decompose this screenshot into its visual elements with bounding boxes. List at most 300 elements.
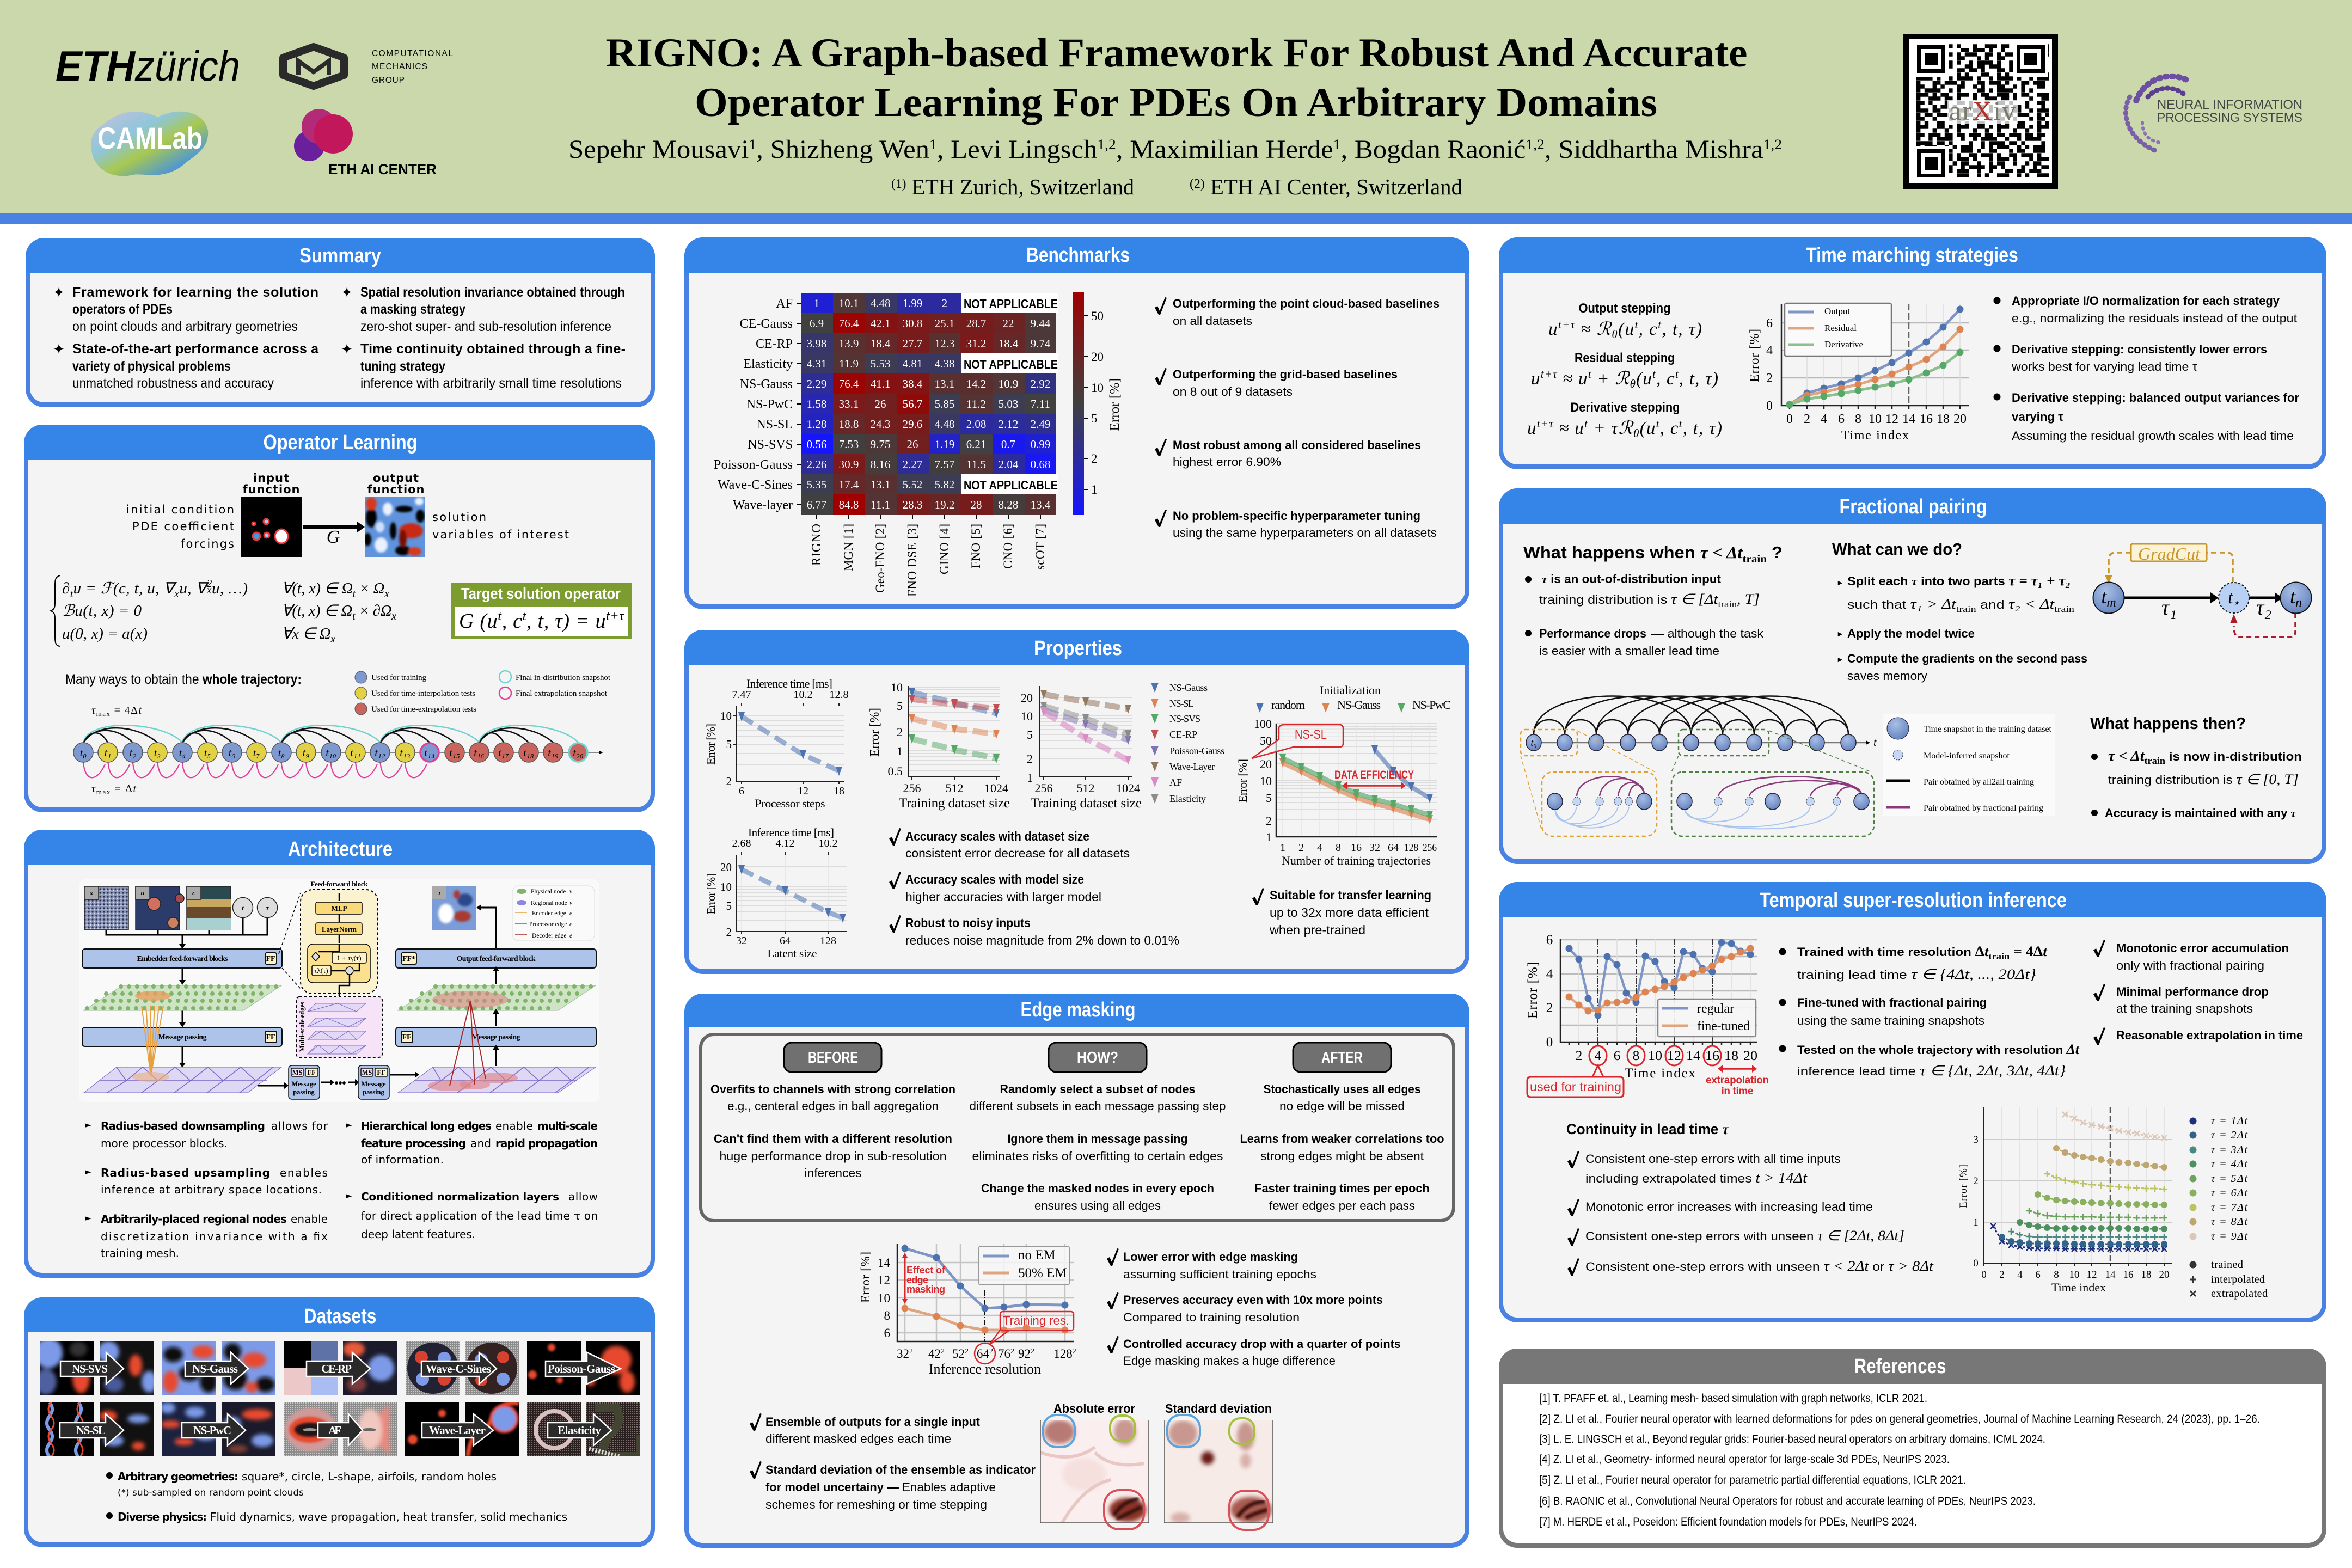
chart: transfer learning: 1 xyxy=(1266,830,1272,844)
what can we do block: saves memory xyxy=(1847,669,1928,683)
feed-forward block detail: LayerNorm xyxy=(322,925,357,933)
heatmap values: 1.28 xyxy=(807,418,826,431)
architecture notes: right: enable xyxy=(495,1119,533,1132)
panel: Operator Learning xyxy=(24,425,655,812)
what can we do block: ► xyxy=(1836,655,1844,664)
chart: dataset size (left): 5 xyxy=(897,699,903,713)
feed-forward block detail: τλ(τ) xyxy=(314,966,328,975)
before / how / after box: BEFORE xyxy=(808,1049,858,1067)
model column labels: MGN [1] xyxy=(842,524,855,571)
benchmark takeaways: Outperforming the grid-based baselines xyxy=(1173,367,1398,381)
uncertainty takeaways: different masked edges each time xyxy=(765,1432,951,1445)
properties takeaways: Accuracy scales with model size xyxy=(905,872,1084,886)
architecture notes: right: feature processing xyxy=(361,1137,466,1150)
chart: latent size: Inference time [ms] xyxy=(748,826,834,839)
legend: datasets: NS-SVS xyxy=(1169,713,1200,724)
legend: datasets: CE-RP xyxy=(1169,729,1197,740)
panel: Edge masking xyxy=(684,994,1469,1548)
dataset tiles: Wave-C-Sines xyxy=(426,1362,491,1375)
heatmap values: 9.75 xyxy=(871,438,890,451)
chart: inference resolution xyxy=(859,1244,1076,1377)
chart: regular vs fine-tuned: 14 xyxy=(1686,1049,1701,1063)
PDE equations: t xyxy=(353,588,356,600)
chart: inference resolution: 12 xyxy=(878,1273,890,1287)
chart: lead time continuity: 3 xyxy=(1973,1134,1979,1146)
trajectory diagram: t xyxy=(138,705,142,716)
stepping formulas: t+τ xyxy=(1541,367,1558,381)
trajectory diagram: t₁₁ xyxy=(350,747,361,759)
heatmap values: 8.16 xyxy=(871,458,890,471)
architecture diagram: Output feed-forward block xyxy=(456,955,536,963)
reference list: [5] Z. LI et al., Fourier neural operator for parametric partial differential equations, ICLR 2021. xyxy=(1539,1474,1966,1486)
heatmap values: 6.77 xyxy=(807,498,826,511)
architecture diagram: Embedder feed-forward blocks xyxy=(137,955,228,963)
colorbar: 20 xyxy=(1091,350,1104,364)
heatmap values: 18.4 xyxy=(999,337,1019,350)
trajectory diagram: t₂₀ xyxy=(573,747,584,759)
left text: unmatched robustness and accuracy xyxy=(72,376,274,391)
trajectory diagram: t₅ xyxy=(204,747,211,759)
chart: dataset size (left): Training dataset size xyxy=(899,796,1010,811)
not applicable labels xyxy=(964,297,1058,492)
output field: τ xyxy=(438,889,442,897)
feed-forward block detail: MLP xyxy=(332,904,347,912)
stepping formulas: t xyxy=(1656,417,1660,430)
chart legend xyxy=(1658,999,1756,1037)
model column labels: GINO [4] xyxy=(938,524,951,574)
colorbar: 2 xyxy=(1091,452,1098,465)
heatmap values: 10.1 xyxy=(839,297,859,310)
dataset row labels: AF xyxy=(776,297,793,311)
heatmap values: 4.48 xyxy=(871,297,890,310)
trajectory diagram: = Δ xyxy=(111,783,132,795)
chart: regular vs fine-tuned: 12 xyxy=(1667,1049,1681,1063)
results checks xyxy=(2093,940,2303,1045)
heatmap values: 76.4 xyxy=(839,317,859,330)
heatmap values: 76.4 xyxy=(839,377,859,390)
legend: lead times: extrapolated xyxy=(2211,1288,2268,1300)
chart: error vs time index: 8 xyxy=(1855,412,1861,426)
heading: References xyxy=(1854,1355,1946,1378)
chart: latent size: 10.2 xyxy=(819,837,837,849)
results checks: Minimal performance drop xyxy=(2116,985,2269,999)
chart: dataset size (left): 1024 xyxy=(984,781,1008,795)
continuity in lead time notes xyxy=(1566,1121,1934,1276)
PDE equations: t xyxy=(352,610,356,622)
architecture notes: left: allows for xyxy=(271,1119,328,1132)
model column labels: Geo-FNO [2] xyxy=(873,524,887,593)
chart: latent size: 128 xyxy=(820,935,836,947)
architecture notes: left: inference at arbitrary space locations. xyxy=(101,1183,322,1196)
header banner xyxy=(0,0,2352,224)
strategy notes: e.g., normalizing the residuals instead of the output xyxy=(2012,311,2298,325)
model column labels: FNO [5] xyxy=(969,524,983,568)
continuity in lead time notes: Consistent one-step errors with all time inputs xyxy=(1585,1152,1841,1166)
chart: dataset size (right): 256 xyxy=(1034,781,1053,795)
chart: error vs time index: 12 xyxy=(1885,412,1898,426)
chart: error vs time index: 20 xyxy=(1953,412,1967,426)
heatmap values: 30.9 xyxy=(839,458,859,471)
colorbar: 10 xyxy=(1091,381,1104,395)
heatmap values: 28 xyxy=(970,498,982,511)
legend: node and edge types xyxy=(512,886,595,941)
architecture notes: right: and xyxy=(470,1137,491,1150)
chart: inference resolution: Inference resolution xyxy=(929,1361,1041,1377)
model column labels xyxy=(810,524,1047,597)
what happens block: What happens when τ < Δt xyxy=(1523,543,1741,562)
what can we do block: ► xyxy=(1836,629,1844,638)
heatmap values: 11.1 xyxy=(871,498,890,511)
stepping formulas: t xyxy=(1588,367,1592,381)
stepping formulas: t+τ xyxy=(1558,318,1576,331)
heatmap values: 2.04 xyxy=(999,458,1019,471)
training resolution callout xyxy=(975,1312,1074,1364)
uncertainty takeaways: schemes for remeshing or time stepping xyxy=(765,1498,987,1511)
architecture diagram xyxy=(79,879,599,1102)
what happens then block xyxy=(2090,714,2302,820)
chart: transfer learning: 100 xyxy=(1254,717,1272,731)
right text: Spatial resolution invariance obtained through xyxy=(360,285,625,300)
training marks and callouts xyxy=(1527,1046,1721,1097)
fractional pairing graph xyxy=(1521,696,1877,836)
chart: lead time continuity: 2 xyxy=(1973,1175,1979,1187)
stepping formulas: (u xyxy=(1636,369,1652,389)
PDE equations: x xyxy=(391,610,396,622)
what happens block xyxy=(1523,543,1783,658)
trajectory heading: Many ways to obtain the whole trajectory: xyxy=(65,672,302,687)
strategy notes: varying τ xyxy=(2012,410,2063,424)
pairing legend: Pair obtained by all2all training xyxy=(1924,777,2034,787)
star bullets: ✦ xyxy=(341,341,353,358)
logo: computational mechanics group: GROUP xyxy=(372,76,405,85)
chart: dataset size (right): 1 xyxy=(1027,771,1033,785)
strategy notes xyxy=(1994,294,2299,443)
architecture notes: left: Radius-based downsampling xyxy=(101,1119,265,1132)
heatmap values: 1.19 xyxy=(935,438,954,451)
PDE equations: u, …) xyxy=(212,580,248,597)
chart: error vs time index: 18 xyxy=(1937,412,1950,426)
chart: inference resolution: 76 xyxy=(998,1347,1010,1361)
chart: transfer learning: NS-Gauss xyxy=(1337,698,1381,712)
dataset row labels: NS-SL xyxy=(756,418,793,432)
architecture notes: left: more processor blocks. xyxy=(101,1137,228,1150)
chart legend xyxy=(1785,303,1891,356)
stepping formulas: + ℛ xyxy=(1592,369,1631,389)
chart: dataset size (right) xyxy=(1021,686,1142,811)
architecture notes: right: Conditioned normalization layers xyxy=(361,1190,559,1203)
logo: NeurIPS: NEURAL INFORMATION xyxy=(2157,97,2302,112)
chart: latent size: 10 xyxy=(720,880,732,893)
legend: lead times: τ = 3Δt xyxy=(2211,1144,2247,1156)
legend: datasets: Elasticity xyxy=(1169,793,1206,804)
legend: lead times: τ = 2Δt xyxy=(2211,1129,2247,1141)
chart: latent size: 4.12 xyxy=(775,837,795,849)
what can we do block: τ₂ < Δt xyxy=(2008,596,2055,612)
what can we do block: Split each τ into two parts τ = τ₁ + τ₂ xyxy=(1847,573,2071,589)
results checks: Reasonable extrapolation in time xyxy=(2116,1028,2303,1042)
legend: lead times: τ = 9Δt xyxy=(2211,1230,2247,1242)
reference list: [4] Z. LI et al., Geometry- informed neural operator for large-scale 3d PDEs, NeurIPS 2023. xyxy=(1539,1453,1950,1466)
architecture diagram: t xyxy=(242,904,244,912)
heatmap values: 24.3 xyxy=(871,418,890,431)
processor blocks xyxy=(258,1065,419,1099)
strategy notes: Assuming the residual growth scales with lead time xyxy=(2012,429,2294,443)
PDE equations xyxy=(51,575,396,646)
logo: NeurIPS: PROCESSING SYSTEMS xyxy=(2157,111,2302,125)
dataset tiles: Wave-Layer xyxy=(429,1424,486,1437)
datasets notes: square*, circle, L-shape, airfoils, random holes xyxy=(242,1470,497,1483)
trajectory diagram: = 4Δ xyxy=(111,705,138,716)
heatmap values: 4.31 xyxy=(807,357,826,370)
GradCut diagram: t xyxy=(2101,586,2106,608)
input labels: PDE coefficient xyxy=(132,520,234,533)
legend: node and edge types: Physical node xyxy=(531,889,566,895)
output field xyxy=(432,886,476,930)
poster title: RIGNO: A Graph-based Framework For Robust And Accurate xyxy=(605,30,1748,76)
logo: ETH AI Center: ETH AI CENTER xyxy=(328,161,437,177)
chart: inference resolution: 2 xyxy=(941,1347,945,1356)
heatmap values: 0.99 xyxy=(1031,438,1050,451)
heading: Benchmarks xyxy=(1026,244,1130,267)
chart: processor steps: 12 xyxy=(798,785,808,797)
heading: Architecture xyxy=(288,838,393,861)
heatmap values: 25.1 xyxy=(935,317,954,330)
chart: error vs time index: 6 xyxy=(1838,412,1845,426)
legend: lead times: trained xyxy=(2211,1259,2243,1271)
heading: Edge masking xyxy=(1020,999,1136,1021)
QR code: arXiv xyxy=(1949,95,2016,126)
affiliations: ETH Zurich, Switzerland xyxy=(906,174,1134,199)
continuity in lead time notes: including extrapolated times t > 14Δt xyxy=(1585,1170,1808,1186)
trajectory diagram: t₁₃ xyxy=(400,747,411,759)
affiliations: (1) xyxy=(891,177,906,191)
heatmap values: 5.82 xyxy=(935,478,954,491)
PDE equations: 2 xyxy=(206,578,212,590)
input fields xyxy=(84,886,278,930)
multi-scale edges detail: Multi-scale edges xyxy=(298,1002,306,1052)
datasets notes: (*) sub-sampled on random point clouds xyxy=(118,1487,304,1498)
chart: lead time continuity: 6 xyxy=(2035,1269,2041,1281)
target solution operator box: Target solution operator xyxy=(461,585,621,603)
dataset tiles: Poisson-Gauss xyxy=(548,1362,615,1375)
PDE equations: × Ω xyxy=(356,580,385,597)
output labels: variables of interest xyxy=(432,528,569,541)
dataset row labels: NS-PwC xyxy=(746,397,793,412)
chart: transfer learning: NS-SL xyxy=(1295,727,1327,742)
chart: lead time continuity: 10 xyxy=(2069,1269,2080,1281)
properties takeaways: Accuracy scales with dataset size xyxy=(905,829,1089,843)
PDE equations: u, ∇ xyxy=(179,580,210,597)
legend: node and edge types: Decoder edge xyxy=(532,933,567,939)
multi-scale edges detail xyxy=(296,997,382,1057)
chart: inference resolution: 14 xyxy=(878,1256,891,1270)
uncertainty takeaways: Enables adaptive xyxy=(902,1480,996,1494)
chart: dataset size (right): 512 xyxy=(1077,781,1094,795)
stepping formulas: (u xyxy=(1618,320,1634,339)
PDE equations: ∀(t, x) ∈ Ω xyxy=(281,580,353,597)
error and deviation maps: Standard deviation xyxy=(1165,1401,1272,1416)
dataset row labels: NS-SVS xyxy=(748,438,793,452)
dataset row labels: Wave-layer xyxy=(733,498,793,512)
chart: lead time continuity: 0 xyxy=(1973,1258,1979,1269)
chart: lead time continuity: 12 xyxy=(2086,1269,2097,1281)
architecture notes: left: ► xyxy=(85,1167,91,1177)
chart: regular vs fine-tuned: 16 xyxy=(1705,1049,1719,1063)
heatmap values: 11.5 xyxy=(966,458,986,471)
reference list: [6] B. RAONIC et al., Convolutional Neural Operators for robust and accurate learning of PDEs, NeurIPS 2023. xyxy=(1539,1495,2036,1508)
chart: inference resolution: 64 xyxy=(977,1347,989,1361)
how column: ensures using all edges xyxy=(1034,1199,1161,1212)
trajectory diagram: t₂ xyxy=(130,747,136,759)
stepping formulas: t+τ xyxy=(1537,417,1554,430)
continuity in lead time notes: Consistent one-step errors with unseen τ < 2Δt or τ > 8Δt xyxy=(1585,1258,1934,1274)
legend: datasets: Poisson-Gauss xyxy=(1169,745,1224,756)
benchmark heatmap xyxy=(714,292,1122,597)
chart: processor steps: 6 xyxy=(739,785,744,797)
chart: regular vs fine-tuned: in time xyxy=(1722,1086,1753,1097)
chart: transfer learning: 256 xyxy=(1423,842,1437,854)
heatmap values: 33.1 xyxy=(839,397,859,411)
input labels xyxy=(126,503,234,550)
left text: State-of-the-art performance across a xyxy=(72,341,319,357)
affiliations: (2) xyxy=(1190,177,1205,191)
chart: dataset size (left) xyxy=(868,681,1010,811)
output labels xyxy=(432,511,569,541)
chart: regular vs fine-tuned: 4 xyxy=(1595,1049,1602,1063)
trajectory diagram: τ xyxy=(91,783,96,795)
uncertainty takeaways: Ensemble of outputs for a single input xyxy=(765,1415,980,1429)
heatmap values: 2.08 xyxy=(966,418,986,431)
data efficiency arrow xyxy=(1334,769,1414,789)
stepping formulas: u xyxy=(1548,320,1557,339)
benchmark takeaways: Most robust among all considered baselines xyxy=(1173,438,1421,452)
chart takeaways xyxy=(1107,1248,1401,1368)
trajectory diagram: t₁₄ xyxy=(424,747,435,759)
architecture diagram: FF xyxy=(266,1033,275,1042)
PDE equations: u = ℱ(c, t, u, ∇ xyxy=(74,580,177,597)
chart: latent size: 64 xyxy=(780,935,791,947)
chart: error vs time index: Error [%] xyxy=(1748,329,1762,382)
output function: function xyxy=(367,483,425,496)
chart legend xyxy=(979,1246,1069,1285)
heatmap values: 56.7 xyxy=(903,397,922,411)
processor blocks: MS xyxy=(362,1069,372,1076)
architecture notes: right: of information. xyxy=(361,1153,444,1166)
heatmap values: 2.29 xyxy=(807,377,826,390)
chart: inference resolution: 2 xyxy=(909,1347,913,1356)
processor blocks: MS xyxy=(292,1069,302,1076)
what happens block: train xyxy=(1742,553,1767,565)
benchmark takeaways: highest error 6.90% xyxy=(1173,455,1281,469)
heatmap values: 18.8 xyxy=(839,418,859,431)
strategy notes: Derivative stepping: consistently lower errors xyxy=(2012,342,2267,356)
transfer learning takeaway: up to 32x more data efficient xyxy=(1270,905,1429,920)
heatmap values: 28.7 xyxy=(966,317,986,330)
what can we do block: train xyxy=(1956,604,1976,614)
panel: Time marching strategies xyxy=(1499,237,2326,469)
logo: NeurIPS xyxy=(2126,76,2302,151)
arrow: operator G: G xyxy=(327,527,340,547)
target solution operator box: t+τ xyxy=(606,609,624,623)
target solution operator box: , t, τ) = u xyxy=(526,610,605,633)
trajectory diagram: t₁₉ xyxy=(548,747,559,759)
PDE equations: ∀(t, x) ∈ Ω xyxy=(281,602,353,620)
chart: error vs time index: 0 xyxy=(1786,412,1793,426)
properties takeaways xyxy=(889,828,1179,947)
continuity in lead time notes: Monotonic error increases with increasing lead time xyxy=(1585,1200,1873,1214)
chart: lead time continuity: 0 xyxy=(1981,1269,1987,1281)
heading: Properties xyxy=(1034,637,1122,660)
chart: regular vs fine-tuned: extrapolation xyxy=(1706,1075,1769,1086)
before column: Can't find them with a different resolution xyxy=(714,1132,952,1146)
chart: regular vs fine-tuned: 2 xyxy=(1546,1001,1553,1015)
chart: dataset size (left): 1 xyxy=(897,744,903,758)
chart: inference resolution: 8 xyxy=(884,1309,890,1322)
stepping formulas: t xyxy=(1675,367,1679,381)
chart: dataset size (right): 1024 xyxy=(1116,781,1140,795)
dataset tiles: CE-RP xyxy=(321,1362,352,1375)
dataset row labels: CE-RP xyxy=(756,337,793,351)
architecture notes: right: for direct application of the lead time τ on xyxy=(361,1209,598,1222)
stepping formulas: u xyxy=(1531,369,1540,389)
stepping formulas: , t, τ) xyxy=(1679,369,1718,389)
chart: regular vs fine-tuned: 18 xyxy=(1724,1049,1738,1063)
before / how / after box: AFTER xyxy=(1321,1049,1363,1067)
architecture notes: left: Arbitrarily-placed regional nodes xyxy=(101,1212,287,1226)
stepping formulas: ≈ u xyxy=(1554,419,1584,438)
logo: CAMLab xyxy=(91,112,208,176)
authors: 1 xyxy=(929,137,937,152)
heatmap values: 29.6 xyxy=(903,418,922,431)
results checks: Monotonic error accumulation xyxy=(2116,941,2289,955)
effect annotation: Effect of xyxy=(906,1265,946,1276)
legend: datasets: NS-Gauss xyxy=(1169,682,1208,693)
stepping formulas: t xyxy=(1679,417,1683,430)
logo: computational mechanics group: MECHANICS xyxy=(372,62,427,71)
heatmap values: 0.56 xyxy=(807,438,826,451)
after column: Stochastically uses all edges xyxy=(1263,1082,1421,1096)
chart: regular vs fine-tuned: fine-tuned xyxy=(1697,1019,1750,1033)
benchmark takeaways: using the same hyperparameters on all datasets xyxy=(1173,526,1437,540)
after column: Learns from weaker correlations too xyxy=(1240,1132,1444,1146)
heatmap values: 7.57 xyxy=(935,458,954,471)
what happens block: τ is an out-of-distribution input xyxy=(1542,572,1722,586)
PDE equations: x xyxy=(330,633,335,645)
chart: regular vs fine-tuned: 6 xyxy=(1546,933,1553,947)
chart takeaways: Edge masking makes a huge difference xyxy=(1123,1354,1336,1368)
legend: node and edge types: v xyxy=(569,900,573,906)
architecture diagram: Message passing xyxy=(471,1033,520,1042)
stepping formulas: + τℛ xyxy=(1588,419,1634,438)
right text: Time continuity obtained through a fine- xyxy=(360,341,626,357)
chart: regular vs fine-tuned xyxy=(1526,933,1769,1097)
heatmap values: 13.1 xyxy=(935,377,954,390)
architecture notes: left: ► xyxy=(346,1120,352,1130)
processor blocks: passing xyxy=(363,1088,385,1096)
after column: fewer edges per each pass xyxy=(1269,1199,1415,1212)
chart: latent size: 20 xyxy=(720,861,732,874)
trajectory legend: Final in-distribution snapshot xyxy=(516,673,611,682)
chart: lead time continuity: 1 xyxy=(1973,1217,1979,1228)
architecture notes: left: ► xyxy=(346,1191,352,1200)
heading: Operator Learning xyxy=(264,431,417,454)
dataset tiles xyxy=(34,1338,640,1457)
heatmap values: 42.1 xyxy=(871,317,890,330)
chart: dataset size (right): 5 xyxy=(1027,728,1033,742)
chart: lead time continuity: 2 xyxy=(1999,1269,2005,1281)
chart: lead time continuity: Time index xyxy=(2051,1281,2106,1294)
architecture diagram: FF xyxy=(402,1033,412,1042)
